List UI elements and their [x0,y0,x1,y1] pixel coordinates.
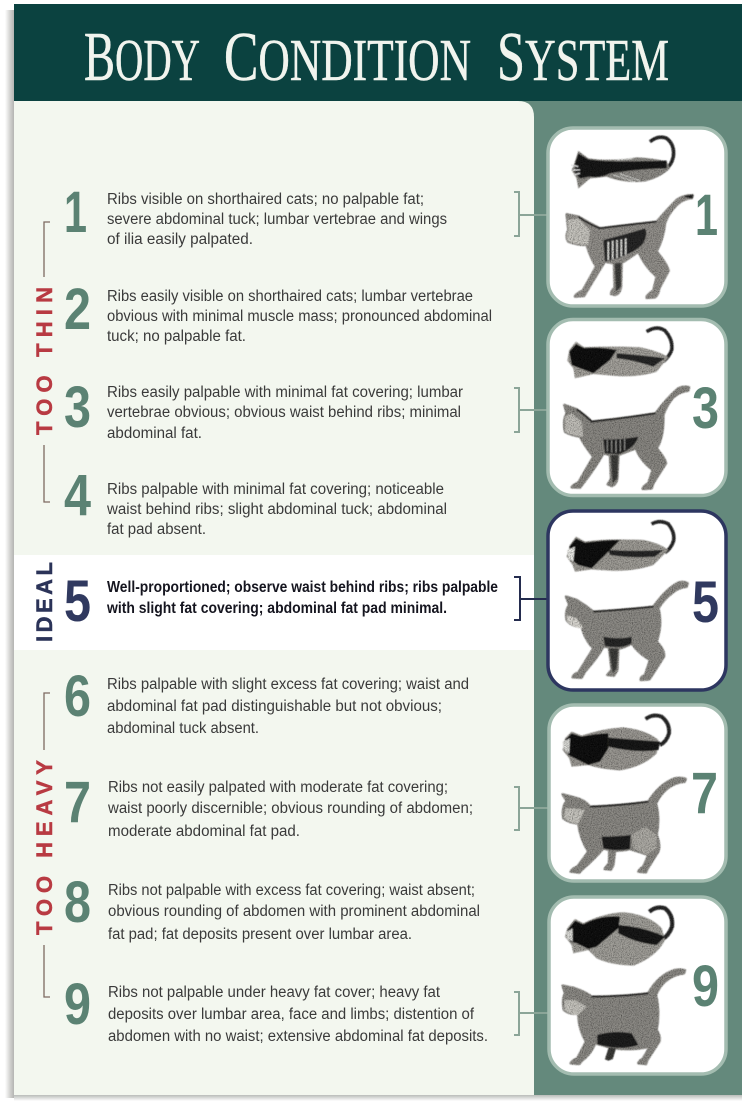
item 9: 9 [64,972,91,1037]
card: cat score 5 (ideal): 5 [692,570,719,635]
side label: too thin [32,222,57,502]
title: Body Condition System: SYSTEM [497,19,669,96]
item 8: fat pad; fat deposits present over lumbar area. [108,926,412,943]
item 4 [64,463,447,538]
item 6: 6 [64,664,91,729]
icon: lean cat top view [567,328,672,378]
item 3 [64,375,463,442]
item 5: 5 [64,569,91,634]
icon: overweight cat top view [563,715,669,770]
item 7: waist poorly discernible; obvious rounding of abdomen; [107,800,473,817]
icon: lean cat side view [564,387,689,489]
item 1 [64,180,447,248]
icon: obese cat side view [563,970,685,1064]
card: cat score 7: 7 [691,761,718,826]
item 9 [64,972,488,1045]
item 2: obvious with minimal muscle mass; pronounced abdominal [107,308,492,325]
item 9: Ribs not palpable under heavy fat cover; heavy fat [108,984,441,1001]
card: cat score 1: 1 [695,183,718,248]
title banner [14,4,742,101]
item 3: 3 [64,375,91,440]
item 8: Ribs not palpable with excess fat covering; waist absent; [108,882,475,899]
item 3: Ribs easily palpable with minimal fat covering; lumbar [107,384,463,401]
item 4: fat pad absent. [107,521,206,538]
green cat column background [510,101,742,1095]
item 8: 8 [64,870,91,935]
icon: obese cat top view [565,907,672,966]
item 7 [64,770,473,840]
side label: too thin: TOO THIN [32,287,57,435]
item 7: moderate abdominal fat pad. [108,823,300,840]
item 3: abdominal fat. [107,425,202,442]
item 8: obvious rounding of abdomen with prominent abdominal [108,903,480,920]
connector bracket 3 [514,388,547,432]
item 8 [64,870,480,943]
item 5 [64,569,498,634]
icon: ideal cat side view [566,582,688,680]
item 5: with slight fat covering; abdominal fat pad minimal. [106,600,447,617]
item 2: Ribs easily visible on shorthaired cats; lumbar vertebrae [107,288,473,305]
connector bracket 1 [514,192,547,236]
item 6: abdominal fat pad distinguishable but not obvious; [107,698,442,715]
icon: ideal cat top view [567,522,674,572]
item 2: 2 [64,277,91,342]
item 7: Ribs not easily palpated with moderate fat covering; [108,779,448,796]
item 5: Well-proportioned; observe waist behind ribs; ribs palpable [107,579,498,596]
card: cat score 9: 9 [692,954,719,1019]
side label: ideal: IDEAL [32,562,57,642]
title: Body Condition System [84,19,669,96]
card: cat score 9 [549,897,726,1074]
card: cat score 3 [548,320,726,496]
icon: overweight cat side view [563,778,686,873]
item 4: waist behind ribs; slight abdominal tuck; abdominal [106,501,447,518]
item 4: Ribs palpable with minimal fat covering; noticeable [107,481,444,498]
item 9: deposits over lumbar area, face and limbs; distention of [108,1006,475,1023]
item 6: Ribs palpable with slight excess fat covering; waist and [107,676,469,693]
icon: thin cat side view [567,195,693,298]
side label: too heavy [32,693,57,997]
item 9: abdomen with no waist; extensive abdominal fat deposits. [108,1028,488,1045]
title: Body Condition System: BODY [84,19,200,96]
card: cat score 7 [549,705,726,881]
side label: too heavy: TOO HEAVY [32,760,57,935]
title: Body Condition System: CONDITION [224,19,471,96]
connector bracket 5 [514,577,547,620]
connector bracket 9 [514,992,548,1035]
item 1: 1 [64,180,87,245]
item 1: of ilia easily palpated. [107,231,253,248]
item 4: 4 [64,463,91,528]
card: cat score 1 [548,128,726,306]
item 1: severe abdominal tuck; lumbar vertebrae and wings [107,211,447,228]
item 2 [64,277,492,345]
item 3: vertebrae obvious; obvious waist behind ribs; minimal [107,404,461,421]
connector bracket 7 [514,787,548,830]
card: cat score 5 (ideal) [548,511,726,690]
ideal highlight band [14,555,534,650]
icon: thin cat top view [572,137,674,188]
panel: descriptions [14,101,534,1095]
item 2: tuck; no palpable fat. [107,328,246,345]
item 1: Ribs visible on shorthaired cats; no palpable fat; [107,191,424,208]
item 6 [64,664,469,737]
item 7: 7 [64,770,91,835]
item 6: abdominal tuck absent. [107,720,259,737]
card: cat score 3: 3 [692,376,719,441]
